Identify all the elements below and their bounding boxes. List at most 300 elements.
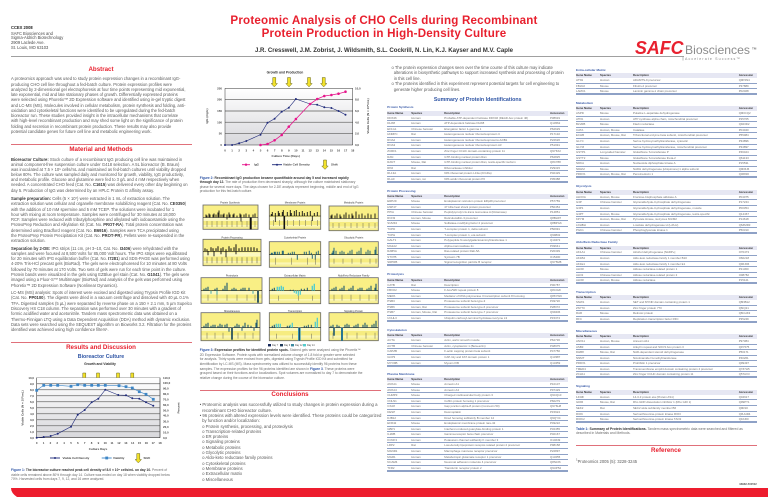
abstract text: potential candidate genes for future cell line and metabolic engineering work. (11, 129, 152, 134)
table: protein synthesis: RANT (387, 160, 395, 164)
table: plasma membrane: Human (411, 466, 421, 470)
figure 2 caption: Figure 2: Recombinant IgG production became quantifiable around day 5 and increased rapidly (200, 176, 349, 180)
table: protein synthesis: P29315 (550, 166, 560, 170)
table: signaling: Human (600, 412, 609, 416)
table: plasma membrane: Human (411, 454, 421, 458)
table: miscellaneous: Ankyrin repeat and SOCS box protein 3 (633, 345, 684, 349)
table: aldo/keto reductase family: ALDR (576, 278, 584, 282)
table: protein processing: SRPRB (387, 260, 397, 264)
table: plasma membrane: DJB12 (387, 416, 396, 420)
text: Plasma Membrane (387, 372, 414, 376)
table: metabolism: GSTT2 (576, 156, 585, 160)
table: plasma membrane: Accession (550, 377, 564, 381)
table: plasma membrane: Q9CQ10 (550, 393, 561, 397)
table: plasma membrane: Human (411, 460, 421, 464)
table: protein processing: 47 kDa heat shock protein precursor (444, 205, 491, 209)
table: metabolism: P46424 (739, 150, 749, 154)
table: protein synthesis: ROA3 (387, 143, 395, 147)
chart: growth and production: 200 (217, 98, 222, 102)
table: transcription: Gene Name (576, 295, 592, 299)
table: proteolysis: PSB6 (387, 305, 395, 309)
table: plasma membrane: Mouse (411, 388, 420, 392)
small chart: extracellular matrix (269, 275, 321, 304)
table: aldo/keto reductase family: Aldo-keto reductase family 1 member B10 (633, 256, 687, 260)
table: protein processing: Endoplasmic reticulum protein ERp29 precursor (444, 199, 506, 203)
table: plasma membrane: Gamma-receptor beta chain precursor (444, 432, 493, 436)
table: plasma membrane: Q8N3J6 (550, 460, 561, 464)
chart: growth and viability: 4 (63, 441, 65, 445)
text: bioreactor culture: day 5. Production of IgG was determined by an HPLC Protein G affinity assay. (11, 188, 154, 193)
table: protein synthesis: P51991 (550, 143, 560, 147)
table: protein synthesis: P05388 (550, 177, 560, 181)
table: protein processing: P20339 (550, 249, 560, 253)
table 1 caption: described in Materials and Methods. (576, 431, 630, 435)
abstract text: oxidation and cytoskeletal functions were identified to be upregulated during the fed-batch (11, 108, 175, 113)
small chart: cytoskeletal protein: Cytoskeletal Protein (284, 236, 307, 239)
table: miscellaneous: Human (600, 367, 609, 371)
table: extra-cellular matrix: Laminin gamma-1 chain precursor (633, 89, 677, 93)
table: extra-cellular matrix (576, 68, 757, 95)
table: protein synthesis: ATP-dependent helicase DHX8 (444, 121, 484, 125)
table: plasma membrane: Annexin A1 (444, 382, 459, 386)
table: protein synthesis: Human (411, 171, 421, 175)
table: transcription: Retinoic protein (633, 311, 653, 315)
table: protein synthesis: P62629 (550, 127, 560, 131)
table: cytoskeleton: Actin, cytoplasmic 1 (Beta-actin) (444, 344, 486, 348)
small chart: glycolytic protein: Glycolytic Protein (344, 236, 364, 239)
table: signaling: Q04917 (739, 395, 749, 399)
table: aldo/keto reductase family: Gene Name (576, 246, 592, 250)
table: aldo/keto reductase family: Alcohol dehydrogenase [NADP+] (633, 250, 675, 254)
table: miscellaneous: Human, Mouse (600, 339, 620, 343)
conference and affiliation block: Sigma-Aldrich Biotechnology (11, 35, 63, 40)
table: transcription: ZN770 (576, 306, 585, 310)
table: miscellaneous: ASB3 (576, 345, 583, 349)
table: protein synthesis: ROA2 (387, 138, 395, 142)
table: protein processing: Mouse (411, 199, 420, 203)
table: protein processing: Sulfatase-modifying factor 2 precursor (444, 221, 493, 225)
table: protein processing: Q8BPG6 (550, 221, 562, 225)
chart: growth and production: 6 (267, 149, 269, 153)
chart: growth and viability: 1,0 (30, 430, 34, 434)
chart: growth and production: 100 (217, 120, 222, 124)
chart: growth and production: 7 (274, 149, 276, 153)
table: metabolism: Long-tailed hamster (600, 150, 626, 154)
table: cytoskeleton: Gene Name (387, 333, 403, 337)
table: signaling: RIOK2 (576, 417, 585, 421)
table: protein synthesis: P38919 (550, 116, 560, 120)
table: protein processing: Polypeptide N-acetylgalactosaminyltransferase 1 (444, 238, 507, 242)
table: metabolism: ECHB (576, 133, 584, 137)
table: plasma membrane: Q9UP52 (550, 466, 561, 470)
conclusions continued: in this cell line. (394, 76, 421, 81)
table: plasma membrane: Gene Name (387, 377, 403, 381)
chart: growth and production: Growth and Production (267, 70, 303, 74)
table: proteolysis: FBXO2 (387, 288, 397, 292)
table: miscellaneous: Accession (739, 334, 753, 338)
table: glycolysis: P00354 (739, 206, 749, 210)
table: plasma membrane: P15924 (550, 410, 560, 414)
table: glycolysis: Fructose-bisphosphate aldolase A (633, 195, 677, 199)
title: Protein Production in High-Density Culture (262, 27, 506, 40)
table: metabolism: Human (600, 145, 609, 149)
table: protein processing: Alpha-mannosidase 2x (444, 244, 474, 248)
chart: growth and production: 0 (224, 149, 226, 153)
table: protein synthesis: Human (411, 155, 421, 159)
chart: growth and viability (20, 362, 180, 463)
table: signaling: Q9R1K (739, 406, 748, 410)
table: cytoskeleton: Human (411, 349, 421, 353)
table: metabolism: Glutathione S-transferase theta-2 (633, 156, 676, 160)
table: protein synthesis: Rat (411, 166, 416, 170)
table: protein synthesis: HNRPC (387, 132, 398, 136)
table: protein synthesis: Mouse, Rat (411, 160, 426, 164)
abstract text: late exponential, mid and late stationary phases of growth. Differentially expressed proteins (11, 92, 178, 97)
figure 2 caption: production for this fed-batch culture. (200, 189, 252, 193)
chart: growth and viability: 10,0 (28, 376, 34, 380)
small chart: cytoskeletal protein (269, 236, 321, 267)
chart: growth and viability: 10 (104, 441, 107, 445)
chart: growth and production: 15 (330, 149, 333, 153)
small chart legend: Day 14 (307, 344, 315, 347)
table: metabolism: Peroxiredoxin 1 (633, 172, 653, 176)
table: metabolism: Human (600, 139, 609, 143)
table: plasma membrane: Human (411, 438, 421, 442)
text: Cytoskeleton (387, 328, 407, 332)
table: protein synthesis: ZCRF1 (387, 149, 397, 153)
table: plasma membrane: NCAM4 (387, 460, 397, 464)
table: glycolysis: Q6ZMR3 (739, 223, 750, 227)
table: metabolism: Q923D2 (739, 122, 749, 126)
text: Signaling (576, 384, 590, 388)
table: cytoskeleton: Human (411, 338, 421, 342)
table: plasma membrane: Human (411, 410, 421, 414)
table: glycolysis: Pyruvate kinase, isozymes M1/M2 (633, 217, 677, 221)
table: signaling: Accession (739, 390, 753, 394)
figure 1 caption: viable cells remained above 80% through day 14. Culture was ended on day 18 when viability dropped below (11, 473, 170, 477)
chart: growth and viability: 0,0 (30, 436, 34, 440)
table: aldo/keto reductase family: Human, Mouse (600, 278, 620, 282)
table: aldo/keto reductase family: AK1A1 (576, 250, 585, 254)
table: proteolysis: PSB7 (387, 310, 395, 314)
table: signaling: GDIR (576, 400, 583, 404)
conference and affiliation block (11, 24, 64, 50)
table: plasma membrane: Human (411, 449, 421, 453)
table: glycolysis: Chinese hamster (600, 228, 622, 232)
chart: growth and viability: 18 (158, 441, 162, 445)
text: LC-MS analysis: Discovery HS C18 column. The separation was performed over 30 minutes with a gradient of (11, 306, 181, 311)
table: metabolism: Serine hydroxymethyltransferase, cytosolic (633, 139, 688, 143)
table: aldo/keto reductase family: O70473 (739, 250, 749, 254)
conclusions list: o Miscellaneous (202, 476, 233, 482)
conclusions list: o Transcription-related proteins (202, 429, 261, 434)
table: extra-cellular matrix: Accession (739, 73, 753, 77)
table: protein processing: Human (411, 255, 421, 259)
conclusions continued: o The proteins identified in this experiment represent potential targets for cell engineering to (392, 81, 559, 86)
table: signaling: Mouse (600, 417, 609, 421)
table: protein synthesis: Human (411, 149, 421, 153)
header rule (11, 55, 684, 58)
chart: growth and viability: 90,0 (163, 387, 169, 391)
table: protein processing: O15400 (550, 255, 560, 259)
table: aldo/keto reductase family: AK1E1 (576, 262, 585, 266)
chart: growth and production: 6,0 (355, 109, 359, 113)
table: cytoskeleton: P62736 (550, 338, 560, 342)
table: miscellaneous: Zinc finger CCHC domain containing protein 11 (633, 372, 693, 376)
small chart: protein processing: Protein Processing (222, 237, 243, 240)
table: extra-cellular matrix: Human (600, 78, 609, 82)
heading: bioreactor culture: Bioreactor Culture (78, 354, 124, 360)
text: sample preparation: extraction solution. (11, 238, 46, 243)
table: glycolysis: Chinese hamster (600, 200, 622, 204)
logo: SAFC Biosciences: TM (752, 46, 757, 50)
table: proteolysis: CATB (387, 283, 395, 287)
chart: growth and viability: 30,0 (163, 419, 169, 423)
chart: growth and viability: Viable Cells (N × 10⁶/mL) (20, 390, 24, 426)
chart: growth and production: 8 (281, 149, 283, 153)
table: proteolysis: Human (411, 294, 421, 298)
table: protein processing: ERP29 (387, 199, 396, 203)
conclusions list: o Protein synthesis, processing, and proteolysis (202, 424, 293, 429)
chart: growth and viability: Percent (176, 402, 180, 414)
table: miscellaneous: Description (633, 334, 649, 338)
table: plasma membrane: ANXA4 (387, 388, 397, 392)
text: bioreactor culture: needed. A concentrated CHO feed (Cat. No. C1615) was delivered every other day beginning on (11, 182, 188, 187)
table: glycolysis: KPYM (576, 217, 584, 221)
chart: growth and viability: Growth and Viability (84, 362, 116, 366)
table: glycolysis: ALDOA (576, 195, 586, 199)
table: plasma membrane (387, 372, 568, 472)
heading: results and discussion: Results and Discussion (66, 344, 136, 350)
table: plasma membrane: ANXA1 (387, 382, 397, 386)
table: plasma membrane: Q13255 (550, 454, 560, 458)
table: protein processing: TCPH (387, 233, 395, 237)
chart: growth and production: 3 (245, 149, 247, 153)
table: proteolysis: Description (444, 283, 459, 287)
table: glycolysis: Human, Mouse (600, 195, 620, 199)
small chart: membrane protein: Membrane Protein (285, 202, 306, 205)
table: metabolism: Q9DCQ2 (739, 111, 751, 115)
chart: growth and production: Viable Cells (N × 10⁶/mL) (366, 98, 370, 134)
table: cytoskeleton: GCP3 (387, 355, 395, 359)
table: protein synthesis: Rat (411, 132, 416, 136)
figure 1 caption: Figure 1: The bioreactor culture reached peak cell density of 8.0 × 10⁶ cells/mL on day 10. Percent of (11, 468, 167, 472)
table: metabolism: Human, Mouse, Rat (600, 133, 626, 137)
table: protein synthesis: Human (411, 138, 421, 142)
table: metabolism (576, 101, 757, 178)
chart: growth and production: 18 (351, 149, 355, 153)
table: plasma membrane: Annexin A4 (444, 388, 459, 392)
figure 3 caption: for analysis. Thirty spots were excised from gels, digested using Trypsin Profile IGD Kit and submitted for (200, 357, 353, 361)
figure 1 caption: 70%. Harvested cells from days 7, 9, 12, and 16 were analyzed. (11, 477, 104, 481)
table: metabolism: Human, Mouse, Rat (600, 172, 626, 176)
table: protein processing: Human (411, 244, 421, 248)
table: plasma membrane: DnaJ homolog subfamily B member 12 (444, 416, 494, 420)
text: LC-MS analysis: LC-MS (MS) analysis: Spots of interest were excised and digested using Trypsin Profile IGD Kit (11, 290, 185, 295)
table: metabolism: Mouse (600, 111, 609, 115)
table: protein processing: Q9Y5M8 (550, 260, 561, 264)
table: extra-cellular matrix: ATS9 (576, 78, 583, 82)
chart: growth and production: 4 (253, 149, 255, 153)
table: plasma membrane: Human (411, 399, 421, 403)
table: protein processing: Gene Name (387, 194, 403, 198)
conclusions list: o Cytoskeletal proteins (202, 461, 246, 466)
table: protein synthesis (387, 105, 568, 183)
table: protein processing: P14851 (550, 210, 560, 214)
table: signaling: RIOK (576, 412, 583, 416)
table: glycolysis: Human (600, 223, 609, 227)
table: extra-cellular matrix: LAMC1 (576, 89, 586, 93)
table: signaling: Gene Name (576, 390, 592, 394)
table: proteolysis: Accession (550, 278, 564, 282)
table: proteolysis: Q8CIG8 (550, 288, 561, 292)
table: glycolysis: Glyceraldehyde-3-phosphate dehydrogenase, muscle (633, 206, 702, 210)
chart: growth and viability: 9 (98, 441, 100, 445)
figure 3 caption: identification by LC-MS (MS). Mass spectrometry was utilized to successfully identify 96 proteins from these (200, 362, 357, 366)
table: cytoskeleton: Myosin IXB (444, 361, 459, 365)
table: glycolysis: L-lactate dehydrogenase H (Ldh-H) (633, 223, 678, 227)
text: sample preparation: the ProteoPrep Protein Precipitation Kit (Cat. No. PROT-PR). Pellets were re-suspended in the (11, 233, 184, 238)
table: miscellaneous: Q5TAX3 (739, 372, 750, 376)
table: aldo/keto reductase family: ALD2 (576, 273, 583, 277)
table: transcription: Accession (739, 295, 753, 299)
table: glycolysis: P14618 (739, 217, 749, 221)
conclusions list: o Glycolytic proteins (202, 450, 241, 455)
text: sample preparation: determined using Bradford reagent (Cat. No. B6916). Samples were TCA precipitated using (11, 228, 179, 233)
table: glycolysis: G3P1 (576, 206, 583, 210)
table: glycolysis (576, 184, 757, 234)
table: metabolism: Mouse (600, 167, 609, 171)
table: metabolism: Q61133 (739, 156, 749, 160)
table: metabolism: NDHM (576, 167, 585, 171)
table: protein synthesis: Description (444, 111, 460, 115)
table: miscellaneous: Q7Z7H5 (739, 367, 750, 371)
heading: abstract: Abstract (88, 66, 114, 73)
table: plasma membrane: Human (411, 416, 421, 420)
table: protein processing: RAB5A (387, 249, 397, 253)
table: miscellaneous: ZCH11 (576, 372, 585, 376)
chart: growth and viability: 6 (77, 441, 79, 445)
table: proteolysis: P49720 (550, 299, 560, 303)
small chart: proteolysis: Proteolysis (226, 275, 239, 278)
table: plasma membrane: Macrophage mannose receptor precursor (444, 449, 497, 453)
table: metabolism: Human (600, 161, 609, 165)
chart: growth and viability: 110,0 (163, 376, 170, 380)
text: sample preparation: RCF. Samples were reduced with tributylphosphine and alkylated with iodoacetamide using the (11, 217, 185, 222)
table: transcription: Q8CHK3 (739, 311, 750, 315)
table: plasma membrane: CXA8 (387, 404, 395, 408)
small chart: signaling protein: Signaling Protein (344, 310, 364, 313)
table: protein synthesis: 60S acidic ribosomal protein P0 (444, 177, 485, 181)
table: glycolysis: Description (633, 190, 649, 194)
table: glycolysis: Human, Mouse (600, 212, 620, 216)
text: LC-MS analysis: TFA. Digested samples (5 µL) were separated by reverse phase on a 150 × 2.1 mm, 5 µm Supelco (11, 301, 192, 306)
table: signaling: Q99PT1 (739, 400, 749, 404)
chart: growth and production: 12 (308, 149, 312, 153)
table: protein processing: HSP47 (387, 205, 396, 209)
table: signaling: Serine/threonine-protein kinase TAO2 (633, 417, 681, 421)
table: miscellaneous: Gene Name (576, 334, 592, 338)
table: protein processing: SUMF2 (387, 221, 397, 225)
heading: conclusions: Conclusions (271, 391, 309, 398)
table: protein synthesis: Q14562 (550, 121, 560, 125)
table: plasma membrane: Mouse (411, 393, 420, 397)
text: separation by 2-DE: Separation by 2-DE: IPG strips (11 cm, pH 3–10, Cat. No. I3406) were rehydrated with the (11, 246, 178, 251)
table: protein synthesis: Human (411, 143, 421, 147)
chart: growth and production: 50 (219, 132, 222, 136)
document number: 98982-500502 (739, 483, 757, 486)
conference and affiliation block: SAFC Biosciences and (11, 30, 53, 36)
table: transcription: Human (600, 300, 609, 304)
conclusions list: recombinant CHO bioreactor culture. (202, 408, 272, 413)
table: plasma membrane: Neuronal adhesion molecule 4 precursor (444, 460, 496, 464)
table: miscellaneous: Transmembrane emp24 domain containing protein 4 precursor (633, 367, 713, 371)
table 1 caption: Table 1: Summary of Protein Identifications. Tandem mass spectrometric data were searched and filtered as (576, 427, 743, 431)
table: metabolism: Trifunctional enzyme beta subunit, mitochondrial precursor (633, 133, 708, 137)
chart: growth and production: 150 (217, 109, 222, 113)
table: plasma membrane: EFR42 (387, 421, 396, 425)
table: cytoskeleton: Description (444, 333, 460, 337)
table: plasma membrane: Low-density lipoprotein receptor-related protein 2 precursor (444, 443, 520, 447)
reference text: 1Proteomics 2005 (5): 3228-3245 (576, 457, 637, 464)
logo: SAFC Biosciences: Accelerate Success™ (685, 57, 740, 61)
chart: growth and production: Shift (331, 163, 338, 167)
abstract text: analyzed by 2-dimensional gel electrophoresis at four time points representing mid exponential, (11, 87, 185, 92)
table: metabolism: PRDX1 (576, 172, 586, 176)
conclusions list: o Extracellular matrix (202, 471, 242, 476)
table: signaling: Species (600, 390, 611, 394)
table: plasma membrane: O14649 (550, 438, 560, 442)
table: plasma membrane: Transferrin receptor protein 2 (444, 466, 482, 470)
heading: material and methods: Material and Methods (69, 146, 133, 153)
table: extra-cellular matrix: FBLN2 (576, 84, 585, 88)
table: plasma membrane: Human (411, 404, 421, 408)
table: aldo/keto reductase family: P15121 (739, 278, 749, 282)
table: plasma membrane: Endoplasmic membrane protein rare-42 (444, 421, 495, 425)
table: glycolysis: P50310 (739, 228, 749, 232)
table: miscellaneous: Q9Y575 (739, 345, 749, 349)
table: protein processing: Human (411, 238, 421, 242)
table: protein processing: Human (411, 233, 421, 237)
table: transcription: Q8NB12 (739, 300, 750, 304)
table: protein processing: Human (411, 260, 421, 264)
chart: growth and viability: 100,0 (163, 381, 171, 385)
text: LC-MS analysis (11, 290, 192, 332)
table: metabolism: CATA (576, 128, 583, 132)
table: protein synthesis: GTP-binding nuclear protein Ran (444, 155, 487, 159)
table: glycolysis: LDHBH (576, 223, 586, 227)
text: bioreactor culture: and metabolic profile. Glucose and glutamine were fed to 3 g/L and 4 mM respectively when (11, 177, 179, 182)
table: miscellaneous: Human (600, 372, 609, 376)
small chart: miscellaneous (201, 310, 260, 341)
text: separation by 2-DE: samples and were focused at 8,500 Volts for 85,000 Volt hours. The IPG strips were equilibrated (11, 251, 187, 256)
table: plasma membrane: MGR1 (387, 454, 396, 458)
table: proteolysis: P00787 (550, 283, 560, 287)
small chart legend: Day 9 (284, 344, 291, 347)
chart: growth and production: 0 (220, 143, 222, 147)
table: cytoskeleton: Actin, aortic smooth muscle (444, 338, 480, 342)
text: Miscellaneous (576, 329, 597, 333)
table: plasma membrane: P60279 (550, 399, 560, 403)
chart: growth and production: 5 (260, 149, 262, 153)
figure 3 caption: relative change during the course of the bioreactor culture. (200, 376, 285, 380)
table: glycolysis: Species (600, 190, 611, 194)
table: protein synthesis: Q8C788 (550, 160, 561, 164)
table: plasma membrane: Potassium channel subfamily K member 3 (444, 438, 498, 442)
table: protein processing: Human (411, 227, 421, 231)
table: miscellaneous: NNMT (576, 356, 584, 360)
table: metabolism: Nucleoside diphosphate kinase A (633, 161, 676, 165)
